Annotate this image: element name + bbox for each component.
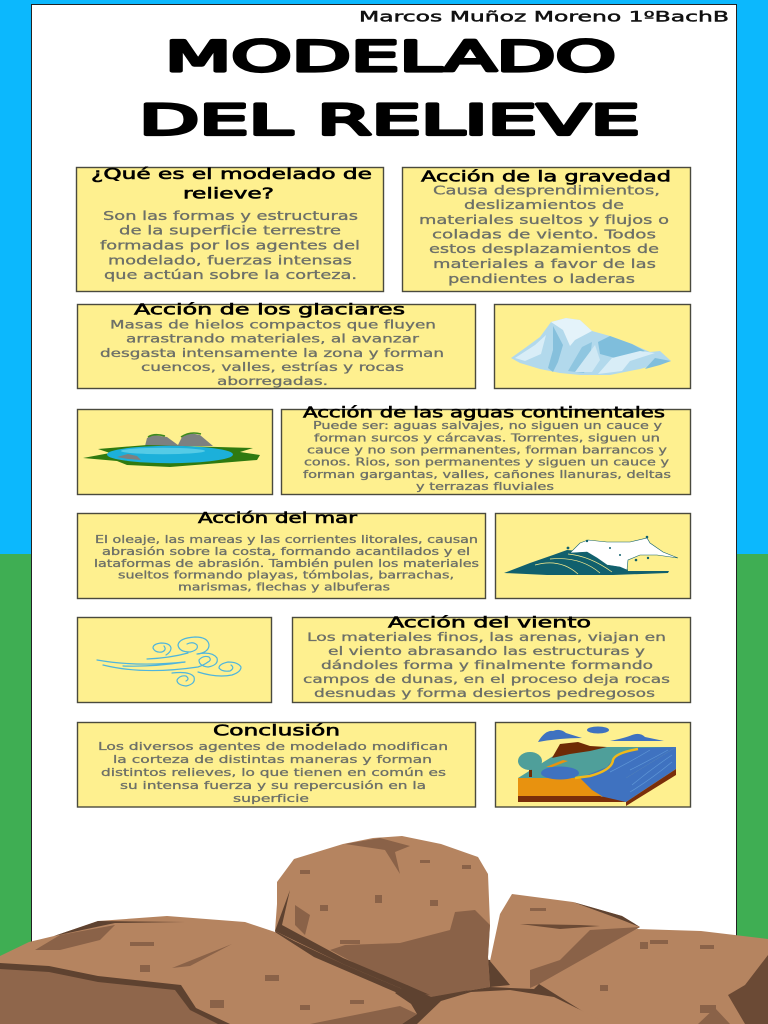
body: mar: sueltos formando playas, tómbolas, barrachas,: [118, 570, 454, 582]
body: gravedad: materiales sueltos y flujos o: [419, 213, 669, 227]
body: gravedad: materiales a favor de las: [433, 257, 656, 271]
body: glaciares: cuencos, valles, estrías y rocas: [141, 360, 404, 374]
panel: acción del viento: [292, 614, 690, 702]
body: qué es: modelado, fuerzas intensas: [108, 253, 352, 267]
icon: landscape block diagram: [518, 726, 676, 806]
icon: lake: [83, 433, 260, 467]
body: conclusión: su intensa fuerza y su repercusión en la: [120, 779, 426, 792]
body: glaciares: [100, 318, 444, 388]
body: qué es: Son las formas y estructuras: [103, 209, 358, 223]
panel: landscape image: [496, 722, 690, 807]
heading: aguas continentales: Acción de las aguas continentales: [303, 404, 665, 422]
panel: iceberg image: [494, 304, 690, 388]
title: DEL RELIEVE: [139, 95, 640, 144]
rock: far right: [539, 929, 768, 1024]
body: aguas continentales: Puede ser: aguas salvajes, no siguen un cauce y: [313, 421, 662, 432]
body: qué es: que actúan sobre la corteza.: [104, 268, 357, 282]
body: gravedad: deslizamientos de: [464, 198, 624, 212]
body: mar: [94, 535, 479, 594]
body: viento: [303, 630, 670, 700]
heading: conclusión: Conclusión: [213, 722, 340, 740]
body: aguas continentales: forman surcos y cárcavas. Torrentes, siguen un: [314, 432, 660, 444]
body: qué es: [100, 209, 360, 282]
heading: gravedad: Acción de la gravedad: [421, 168, 671, 186]
heading: qué es: relieve?: [183, 184, 274, 202]
panel: aguas continentales: [282, 404, 690, 494]
background: sky: [0, 0, 768, 554]
heading: qué es: ¿Qué es el modelado de: [91, 165, 372, 183]
body: qué es: de la superficie terrestre: [119, 224, 341, 238]
panel: wave image: [496, 514, 690, 598]
body: aguas continentales: forman gargantas, valles, cañones llanuras, deltas: [303, 470, 671, 481]
body: viento: el viento abrasando las estructuras y: [328, 644, 645, 658]
body: qué es: formadas por los agentes del: [100, 238, 360, 252]
body: glaciares: aborregadas.: [217, 374, 328, 388]
body: mar: lataformas de abrasión. También pulen los materiales: [94, 558, 479, 570]
rock shadow backing: [275, 931, 620, 1024]
body: conclusión: superficie: [233, 792, 309, 805]
author credit: Marcos Muñoz Moreno 1ºBachB: [359, 10, 729, 26]
body: viento: dándoles forma y finalmente formando: [321, 658, 653, 672]
icon: wind: [97, 637, 241, 686]
panel: conclusión: [78, 722, 476, 807]
body: glaciares: desgasta intensamente la zona y forman: [100, 346, 444, 360]
rock: bottom center: [310, 985, 605, 1024]
panel: qué es el modelado: [76, 165, 384, 292]
heading: qué es: [91, 165, 372, 202]
body: conclusión: la corteza de distintas maneras y forman: [113, 753, 432, 766]
body: viento: Los materiales finos, las arenas, viajan en: [307, 630, 666, 644]
rock: big left: [0, 916, 417, 1024]
body: viento: campos de dunas, en el proceso deja rocas: [303, 672, 670, 686]
body: aguas continentales: cauce y no son permanentes, forman barrancos y: [307, 446, 667, 456]
rock: small right: [490, 894, 640, 989]
body: mar: marismas, flechas y albuferas: [178, 583, 390, 594]
rock: dark lower left: [0, 963, 230, 1024]
body: gravedad: coladas de viento. Todos: [432, 228, 656, 242]
heading: viento: Acción del viento: [388, 614, 591, 632]
body: aguas continentales: conos. Rios, son permanentes y siguen un cauce y: [304, 458, 669, 469]
body: aguas continentales: [303, 421, 671, 493]
body: aguas continentales: y terrazas fluviales: [416, 482, 554, 493]
heading: glaciares: Acción de los glaciares: [134, 300, 405, 318]
body: glaciares: Masas de hielos compactos que fluyen: [110, 318, 436, 332]
rock speckles: [130, 860, 716, 1013]
background: grass: [0, 554, 768, 1024]
rock: center: [275, 836, 490, 997]
body: conclusión: distintos relieves, lo que tienen en común es: [101, 766, 447, 779]
body: conclusión: [98, 740, 448, 805]
body: mar: El oleaje, las mareas y las corrientes litorales, causan: [95, 535, 478, 546]
body: gravedad: [419, 184, 669, 286]
body: gravedad: estos desplazamientos de: [429, 242, 659, 256]
icon: iceberg: [511, 318, 671, 375]
body: mar: abrasión sobre la costa, formando acantilados y el: [102, 546, 470, 558]
heading: mar: Acción del mar: [198, 509, 358, 527]
icon: wave: [504, 536, 678, 575]
title: [139, 32, 640, 144]
panel: lake image: [78, 410, 272, 494]
panel: gravedad: [402, 168, 690, 292]
illustration: rocks: [0, 836, 768, 1024]
body: glaciares: arrastrando materiales, al avanzar: [126, 332, 419, 346]
body: conclusión: Los diversos agentes de modelado modifican: [98, 740, 448, 753]
panel: glaciares: [78, 300, 476, 388]
panel: acción del mar: [78, 509, 486, 598]
title: MODELADO: [165, 32, 616, 81]
body: viento: desnudas y forma desiertos pedregosos: [314, 686, 655, 700]
panel: wind image: [78, 618, 272, 702]
body: gravedad: Causa desprendimientos,: [433, 184, 660, 198]
body: gravedad: pendientes o laderas: [448, 272, 635, 286]
